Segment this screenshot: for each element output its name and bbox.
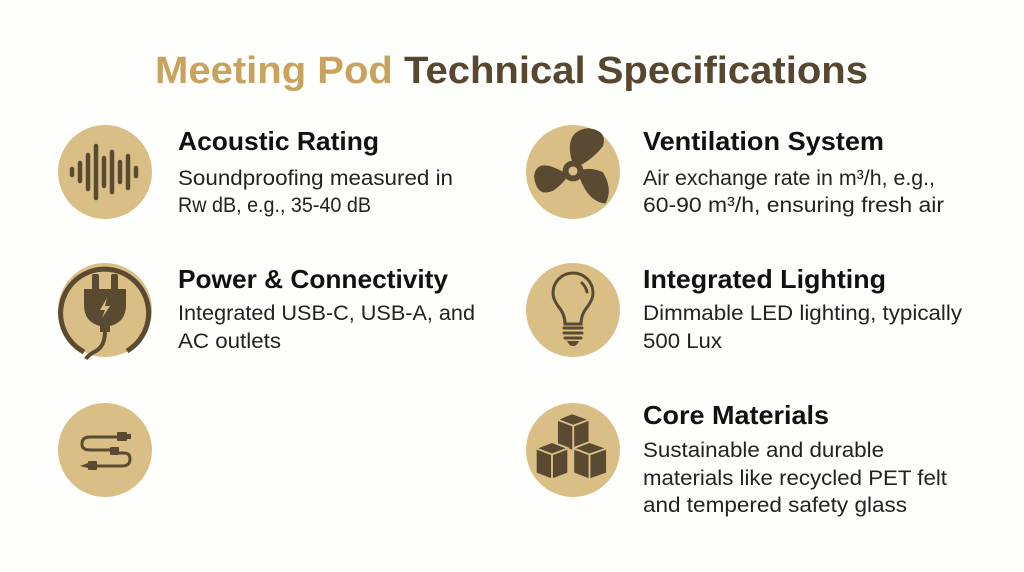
text: integrated lighting: 500 Lux	[643, 329, 722, 353]
icon: sound wave	[58, 125, 152, 219]
text: ventilation system: Air exchange rate in m³/h, e.g.,	[643, 166, 935, 190]
text: core materials: Sustainable and durable	[643, 438, 884, 462]
icon: cubes	[526, 403, 620, 497]
icon: cables	[58, 403, 152, 497]
icon: light bulb	[526, 263, 620, 357]
text: core materials	[643, 400, 947, 517]
icon: fan	[526, 125, 620, 219]
text: power & connectivity: Power & Connectivity	[178, 264, 449, 294]
text: power & connectivity	[178, 264, 475, 353]
text: integrated lighting	[643, 264, 962, 353]
text: acoustic rating: Rw dB, e.g., 35-40 dB	[178, 193, 371, 217]
text: acoustic rating: Acoustic Rating	[178, 126, 379, 156]
text: ventilation system: 60-90 m³/h, ensuring fresh air	[643, 193, 944, 217]
title: Meeting Pod Technical Specifications	[155, 50, 868, 92]
text: integrated lighting: Integrated Lighting	[643, 264, 886, 294]
text: integrated lighting: Dimmable LED lighting, typically	[643, 301, 962, 325]
text: core materials: and tempered safety glass	[643, 493, 907, 517]
text: ventilation system: Ventilation System	[643, 126, 884, 156]
text: core materials: materials like recycled PET felt	[643, 466, 947, 490]
text: power & connectivity: AC outlets	[178, 329, 281, 353]
text: ventilation system	[643, 126, 944, 217]
text: power & connectivity: Integrated USB-C, USB-A, and	[178, 301, 475, 325]
icon: plug	[58, 263, 152, 359]
text: acoustic rating	[178, 126, 453, 217]
text: core materials: Core Materials	[643, 400, 829, 430]
text: acoustic rating: Soundproofing measured in	[178, 166, 453, 190]
